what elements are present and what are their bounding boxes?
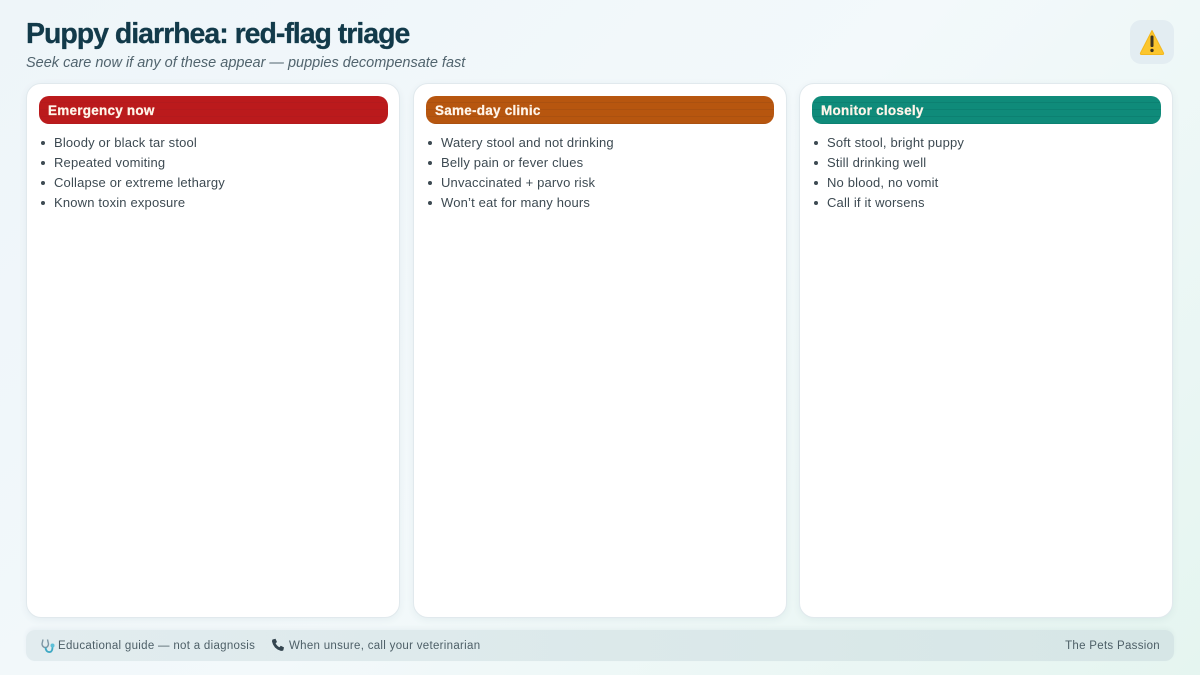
list: monitor signs: Call if it worsens [827, 195, 925, 210]
footer note: educational: Educational guide — not a diagnosis [58, 640, 255, 652]
panel: monitor closely [799, 83, 1173, 618]
list: same-day signs: Won’t eat for many hours [441, 195, 590, 210]
list: monitor signs [814, 135, 964, 210]
heading: emergency now: Emergency now [48, 103, 155, 118]
list: same-day signs: Watery stool and not drinking [441, 135, 614, 150]
list: emergency signs: Repeated vomiting [54, 155, 165, 170]
list: same-day signs: Belly pain or fever clues [441, 155, 583, 170]
list: emergency signs [41, 135, 225, 210]
subtitle: Seek care now if any of these appear — puppies decompensate fast [26, 55, 465, 71]
list: emergency signs: Collapse or extreme lethargy [54, 175, 225, 190]
footer note: call vet: When unsure, call your veterinarian [289, 640, 480, 652]
heading: same-day clinic [426, 96, 774, 124]
title: Puppy diarrhea: red-flag triage [26, 18, 409, 50]
list: emergency signs: Known toxin exposure [54, 195, 185, 210]
heading: monitor closely [812, 96, 1161, 124]
list: same-day signs: Unvaccinated + parvo risk [441, 175, 595, 190]
footer brand: The Pets Passion [1065, 640, 1160, 652]
list: monitor signs: Still drinking well [827, 155, 926, 170]
heading: monitor closely: Monitor closely [821, 103, 924, 118]
icon: warning badge [1130, 20, 1174, 64]
list: same-day signs [428, 135, 614, 210]
list: monitor signs: Soft stool, bright puppy [827, 135, 964, 150]
icon: stethoscope [41, 639, 54, 653]
panel: emergency now [26, 83, 400, 618]
heading: emergency now [39, 96, 388, 124]
list: emergency signs: Bloody or black tar stool [54, 135, 197, 150]
list: monitor signs: No blood, no vomit [827, 175, 938, 190]
panel: same-day clinic [413, 83, 787, 618]
footer bar [26, 630, 1174, 661]
icon: phone [272, 638, 284, 651]
heading: same-day clinic: Same-day clinic [435, 103, 541, 118]
